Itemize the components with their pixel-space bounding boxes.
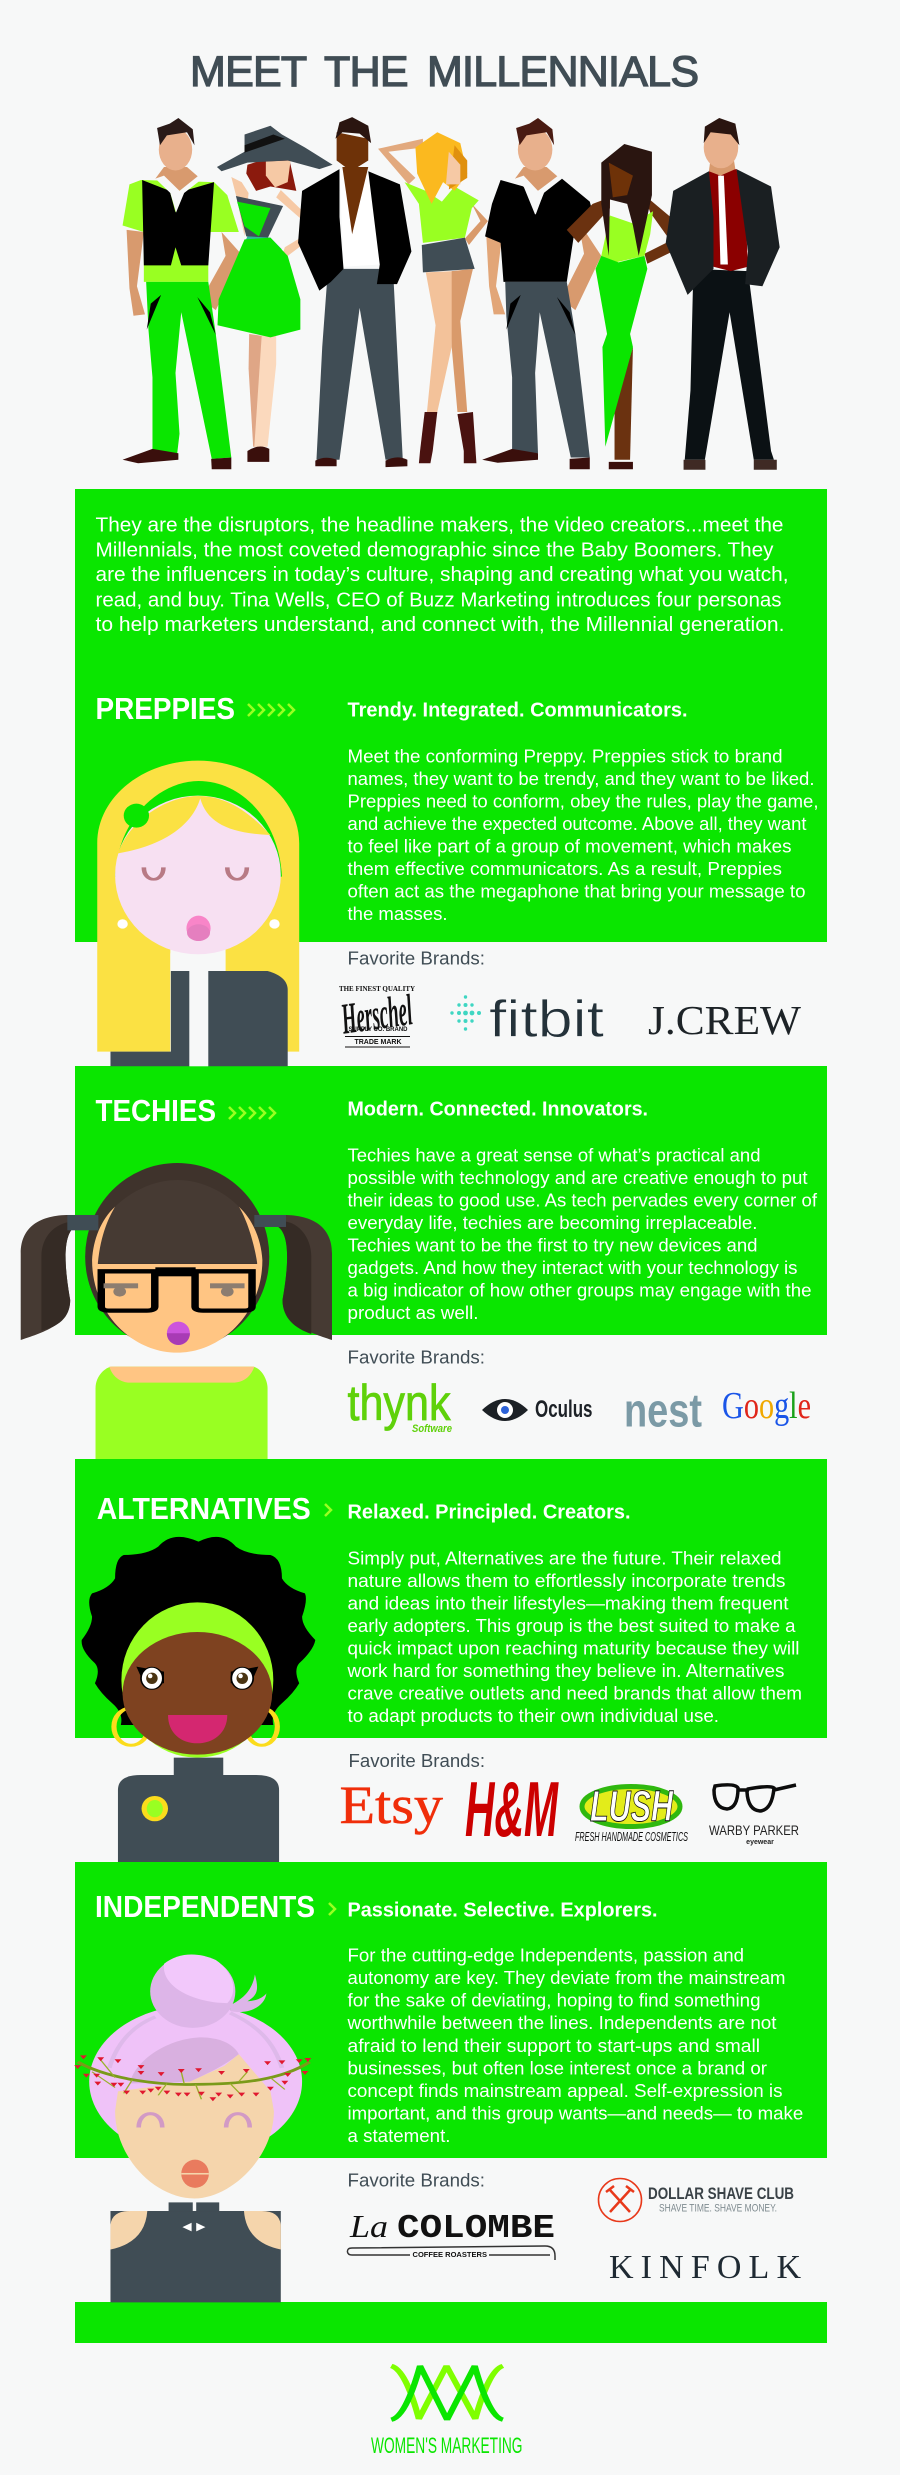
figure: man in black blazer and grey trousers (298, 117, 411, 467)
logo: fitbit: fitbit (489, 991, 605, 1049)
text block: Alternatives description: work hard for something they believe in. Alternatives (346, 1661, 784, 1681)
logo: J.Crew: J.CREW (648, 997, 801, 1043)
section: Preppies heading: PREPPIES (96, 692, 235, 726)
text block: Independents description: Passionate. Selective. Explorers. (348, 1899, 658, 1922)
text block: Alternatives description (346, 1501, 802, 1726)
text block: Alternatives description: quick impact upon reaching maturity because they will (348, 1638, 800, 1658)
logo: Oculus (482, 1396, 592, 1423)
text block: introduction (96, 513, 788, 636)
text block: Independents description: For the cutting-edge Independents, passion and (348, 1946, 744, 1966)
text block: Preppies description (348, 699, 818, 924)
text block: introduction: to help marketers understand, and connect with, the Millennial generation. (96, 613, 785, 636)
text block: Techies description: Techies have a great sense of what’s practical and (348, 1146, 760, 1166)
text block: Independents description: important, and this group wants—and needs— to make (348, 2104, 803, 2124)
text block: introduction: are the influencers in today’s culture, shaping and creating what you watch, (96, 563, 788, 586)
logo: thynk: Software (412, 1423, 452, 1435)
figure: woman in wide hat and green dress (217, 126, 333, 462)
logo: Etsy: Etsy (340, 1775, 443, 1835)
text block: Techies description: their ideas to good use. As tech pervades every corner of (348, 1190, 818, 1210)
text block: Techies description: Modern. Connected. Innovators. (348, 1098, 648, 1121)
illustration: group of seven millennials (123, 117, 780, 470)
text block: Preppies description: them effective communicators. As a result, Preppies (348, 859, 782, 879)
figure: man in lime shirt and black vest (123, 118, 243, 469)
text block: Independents description: afraid to lend their support to start-ups and small (348, 2036, 760, 2056)
text block: Alternatives description: to adapt products to their own individual use. (348, 1706, 719, 1726)
logo: Lush (575, 1782, 688, 1844)
text block: Independents description: autonomy are key. They deviate from the mainstream (348, 1968, 786, 1988)
section: Techies heading: TECHIES (96, 1094, 216, 1128)
logo: Herschel (338, 985, 416, 1048)
text block: Preppies description: Preppies need to conform, obey the rules, play the game, (348, 792, 818, 812)
logo: Warby Parker: WARBY PARKER (709, 1822, 799, 1838)
figure: woman with long dark hair in green gown (567, 144, 690, 469)
text block: Alternatives description: Simply put, Alternatives are the future. Their relaxed (348, 1548, 782, 1568)
section: Alternatives heading: ALTERNATIVES (97, 1492, 311, 1526)
label: Favorite Brands: Favorite Brands: (348, 2170, 485, 2190)
character: Alternative (82, 1537, 315, 1862)
figure: blonde woman in lime top and grey skirt (378, 132, 488, 463)
character: Techie (21, 1163, 332, 1459)
text block: Preppies description: names, they want to be trendy, and they want to be liked. (348, 769, 814, 789)
text block: Preppies description: Trendy. Integrated. Communicators. (348, 699, 688, 722)
text block: Techies description: product as well. (348, 1303, 478, 1323)
text block: Techies description: Techies want to be the first to try new devices and (348, 1236, 758, 1256)
logo: Herschel: TRADE MARK (354, 1039, 402, 1046)
text block: Independents description: businesses, but often lose interest once a brand or (348, 2058, 767, 2078)
logo: Women's Marketing mark (391, 2366, 503, 2420)
text block: Alternatives description: nature allows them to effortlessly incorporate trends (348, 1571, 786, 1591)
figure: man in dark suit and red tie (666, 118, 780, 470)
label: Favorite Brands: Favorite Brands: (348, 1348, 485, 1368)
logo: Herschel: THE FINEST QUALITY (339, 985, 415, 993)
logo: Herschel: SUPPLY CO. BRAND (348, 1027, 408, 1033)
footer green bar (75, 2302, 827, 2343)
logo: thynk: thynk (348, 1375, 451, 1431)
text block: Independents description: worthwhile between the lines. Independents are not (346, 2013, 776, 2033)
title: MEET THE MILLENNIALS (190, 48, 699, 96)
text block: Alternatives description: Relaxed. Principled. Creators. (348, 1501, 630, 1524)
panel: intro and Preppies green block (75, 489, 827, 942)
label: Favorite Brands: Favorite Brands: (348, 1751, 485, 1771)
logo: Oculus: Oculus (535, 1396, 592, 1423)
character: Preppy (97, 761, 299, 1066)
logo: La Colombe: COFFEE ROASTERS (412, 2250, 487, 2259)
logo: Lush: FRESH HANDMADE COSMETICS (575, 1829, 688, 1844)
logo text: Women's Marketing: WOMEN'S MARKETING (371, 2433, 522, 2458)
text block: introduction: Millennials, the most coveted demographic since the Baby Boomers. They (96, 538, 774, 561)
text block: Preppies description: to feel like part of a group of movement, which makes (348, 836, 792, 856)
section: Independents heading: INDEPENDENTS (95, 1890, 315, 1924)
text block: Techies description: everyday life, techies are becoming irreplaceable. (348, 1213, 758, 1233)
logo: Lush: LUSH (590, 1782, 674, 1831)
text block: Techies description (348, 1098, 818, 1323)
text block: Independents description: concept finds mainstream appeal. Self-expression is (348, 2081, 782, 2101)
logo: fitbit (450, 991, 605, 1049)
panel: Independents green block (75, 1862, 827, 2158)
logo: nest: nest (624, 1384, 702, 1437)
logo: Dollar Shave Club (598, 2178, 794, 2222)
character: Independent (74, 1955, 311, 2302)
text block: Alternatives description: early adopters. This group is the best suited to make a (348, 1616, 797, 1636)
logo: Warby Parker: eyewear (746, 1839, 774, 1846)
text block: Independents description (346, 1899, 803, 2146)
text block: Independents description: a statement. (348, 2126, 450, 2146)
panel: Alternatives green block (75, 1459, 827, 1738)
figure: man in black tee and grey trousers (482, 118, 601, 469)
text block: Preppies description: Meet the conforming Preppy. Preppies stick to brand (348, 746, 782, 766)
text block: Independents description: for the sake of deviating, hoping to find something (348, 1990, 760, 2010)
logo: H&M: H&M (465, 1765, 559, 1853)
panel: Techies green block (75, 1066, 827, 1335)
text block: Preppies description: often act as the megaphone that bring your message to (348, 882, 806, 902)
logo: Kinfolk: KINFOLK (609, 2249, 801, 2286)
text block: Techies description: a big indicator of how other groups may engage with the (348, 1280, 812, 1300)
logo: Dollar Shave Club: DOLLAR SHAVE CLUB (648, 2184, 794, 2203)
logo: La Colombe (347, 2208, 555, 2260)
text: Herschel (338, 985, 416, 1044)
logo: Warby Parker (709, 1785, 799, 1846)
text block: introduction: read, and buy. Tina Wells, CEO of Buzz Marketing introduces four personas (96, 588, 782, 611)
logo: Google: Google (722, 1385, 811, 1427)
text block: Techies description: possible with technology and are creative enough to put (348, 1168, 808, 1188)
text block: Alternatives description: crave creative outlets and need brands that allow them (348, 1684, 802, 1704)
logo: La Colombe: COLOMBE (397, 2210, 555, 2247)
logo: La Colombe: La (349, 2208, 388, 2244)
text block: Alternatives description: and ideas into their lifestyles—making them frequent (348, 1594, 788, 1614)
logo: Dollar Shave Club: SHAVE TIME. SHAVE MONEY. (659, 2202, 777, 2214)
text block: Preppies description: the masses. (348, 904, 448, 924)
text block: introduction: They are the disruptors, the headline makers, the video creators...meet the (96, 513, 784, 536)
label: Favorite Brands: Favorite Brands: (348, 948, 485, 968)
text block: Techies description: gadgets. And how they interact with your technology is (348, 1258, 798, 1278)
text block: Preppies description: and achieve the expected outcome. Above all, they want (348, 814, 806, 834)
